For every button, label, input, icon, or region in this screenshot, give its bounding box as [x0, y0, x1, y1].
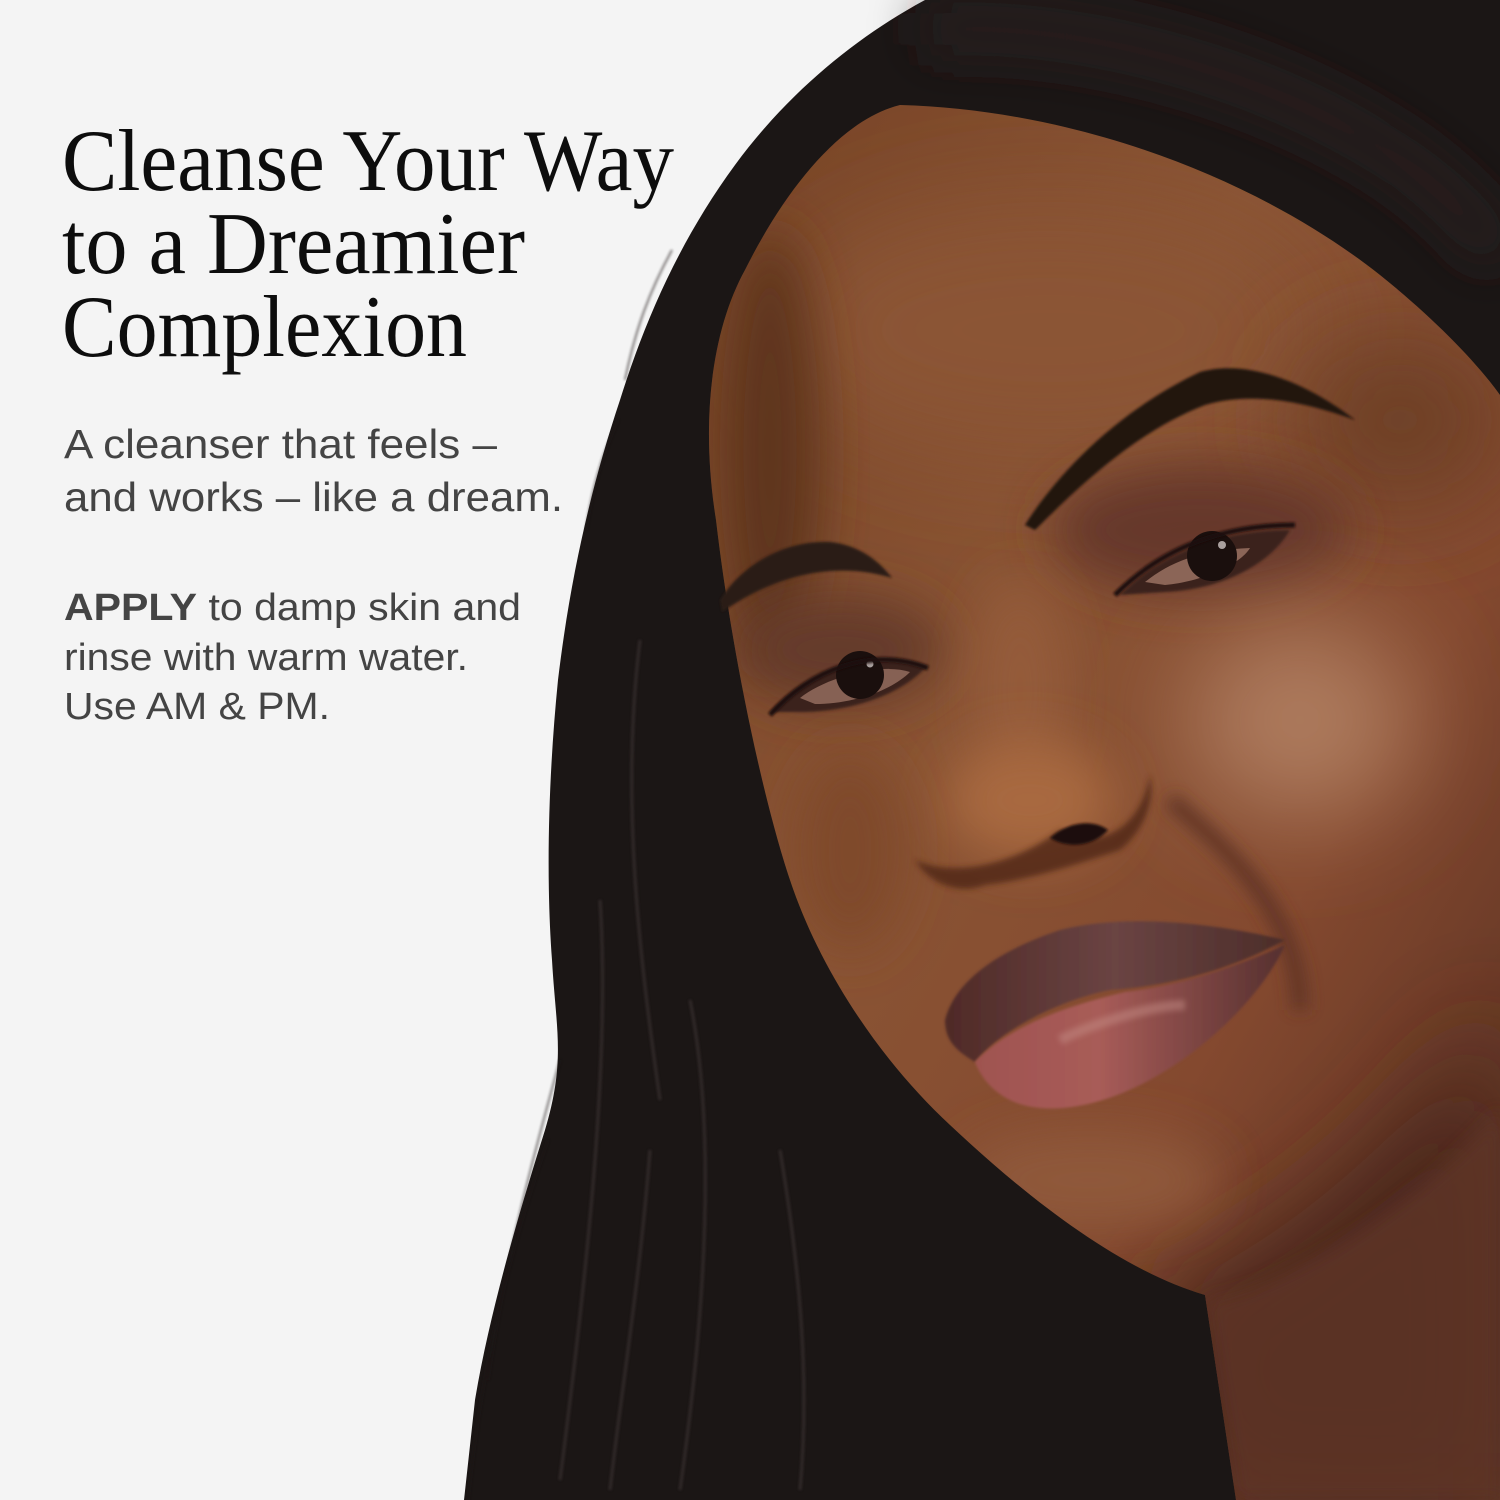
intro text: and works – like a dream.	[64, 474, 563, 520]
forehead shading	[830, 244, 1002, 388]
left eye	[770, 651, 928, 715]
chin tone	[960, 1130, 1220, 1230]
title: Complexion	[62, 279, 467, 376]
portrait photo: model with long dark hair	[464, 0, 1500, 1500]
right eyebrow	[1025, 368, 1355, 530]
lips	[945, 921, 1285, 1108]
nose shadow and nostril	[915, 775, 1151, 889]
hair wisps along the lower-left edge	[468, 250, 672, 1500]
usage instructions: rinse with warm water.	[64, 637, 468, 679]
hair strands: lower lengths	[560, 640, 804, 1490]
title	[62, 113, 674, 376]
intro text	[64, 421, 563, 520]
usage instructions: Use AM & PM.	[64, 686, 330, 728]
nose tip highlight	[945, 740, 1115, 860]
cheek highlight	[1185, 620, 1415, 820]
usage instructions	[64, 587, 521, 728]
lower jaw shadow	[1150, 1000, 1500, 1500]
eye-socket shading	[1050, 465, 1350, 595]
left eyebrow	[720, 542, 892, 612]
right eye	[1115, 525, 1295, 595]
usage instructions: APPLY to damp skin and	[64, 587, 521, 629]
title: Cleanse Your Way	[62, 113, 674, 210]
hair highlights: top sheen	[925, 29, 1500, 255]
face and neck	[690, 90, 1500, 1500]
title: to a Dreamier	[62, 196, 525, 293]
hair	[464, 0, 1500, 1500]
intro text: A cleanser that feels –	[64, 421, 497, 467]
smile fold	[1170, 800, 1300, 1010]
